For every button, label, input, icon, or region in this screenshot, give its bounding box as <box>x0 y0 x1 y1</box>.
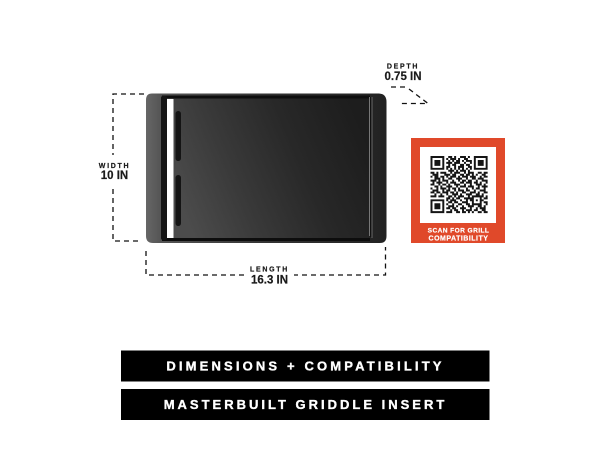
griddle cooking plate <box>173 98 369 238</box>
white mask behind width label <box>95 155 131 185</box>
QR caption <box>428 228 489 242</box>
depth label: DEPTH <box>387 64 419 70</box>
griddle insert <box>146 94 386 243</box>
griddle bottom rim <box>162 238 370 241</box>
griddle white gap <box>167 99 174 238</box>
title banner: dimensions <box>121 350 490 382</box>
QR code <box>430 157 488 212</box>
QR card <box>411 138 505 243</box>
width label: WIDTH <box>99 163 130 170</box>
griddle top rim <box>162 96 370 98</box>
griddle flange <box>146 94 386 243</box>
length label: LENGTH <box>250 266 289 274</box>
depth label <box>384 64 422 83</box>
width dimension line <box>113 94 144 241</box>
width label: 10 IN <box>101 170 128 182</box>
griddle upper slot <box>176 111 181 161</box>
depth label: 0.75 IN <box>384 71 422 83</box>
white mask behind length label <box>246 262 294 288</box>
title banner: product name <box>121 389 490 420</box>
griddle left rim <box>161 96 167 240</box>
length dimension line <box>146 247 386 275</box>
width label <box>99 163 130 182</box>
title banner: dimensions: DIMENSIONS + COMPATIBILITY <box>166 358 445 374</box>
length label: 16.3 IN <box>251 274 288 286</box>
griddle lower slot <box>176 175 181 226</box>
title banner: product name: MASTERBUILT GRIDDLE INSERT <box>164 397 447 412</box>
depth dimension line <box>391 87 428 104</box>
QR card background <box>411 138 505 243</box>
QR white panel <box>420 147 496 223</box>
QR caption: COMPATIBILITY <box>429 235 488 242</box>
length label <box>250 266 289 286</box>
griddle right rim highlight <box>369 97 370 236</box>
QR caption: SCAN FOR GRILL <box>428 228 489 234</box>
